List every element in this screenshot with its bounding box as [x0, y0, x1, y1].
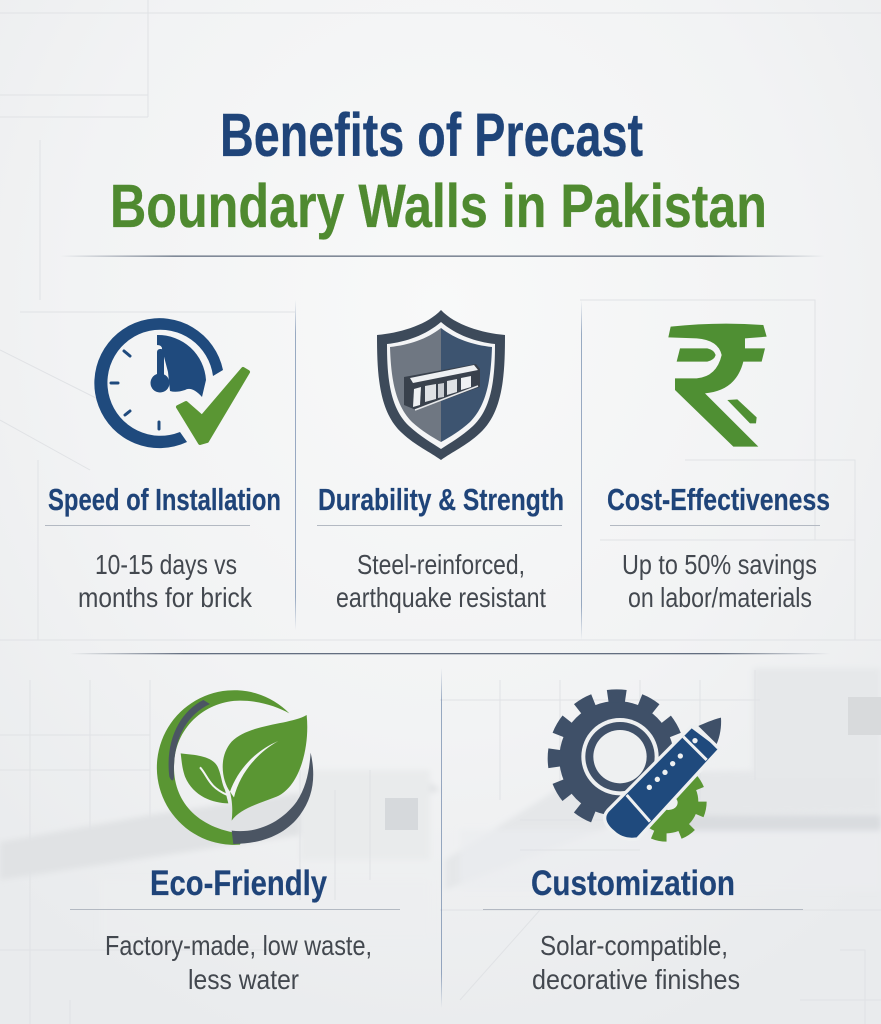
text: speed detail: months for brick [78, 582, 253, 613]
panel: eco-friendly [70, 690, 400, 995]
text: customization detail: decorative finishes [532, 964, 740, 995]
text: eco detail: Factory-made, low waste, [105, 930, 372, 961]
text: speed detail [78, 549, 253, 613]
text: cost detail: on labor/materials [628, 582, 812, 613]
heading: cost effectiveness: Cost-Effectiveness [607, 482, 830, 517]
text: cost detail [622, 549, 817, 613]
heading: customization: Customization [531, 864, 735, 903]
text: eco detail: less water [188, 964, 299, 995]
text: durability detail [336, 549, 546, 613]
text: durability detail: Steel-reinforced, [357, 549, 525, 580]
title: Benefits of Precast [220, 101, 643, 169]
icon: clock with check mark [94, 318, 248, 448]
heading: speed of installation: Speed of Installation [48, 482, 281, 517]
panel: customization [483, 696, 803, 995]
text: speed detail: 10-15 days vs [95, 549, 237, 580]
text: customization detail: Solar-compatible, [540, 930, 728, 961]
text: eco detail [105, 930, 372, 995]
text: customization detail [532, 930, 740, 995]
icon: leaves in a ring [157, 690, 313, 845]
heading: durability and strength: Durability & Strength [318, 482, 564, 517]
panel: speed of installation [45, 318, 281, 613]
text: durability detail: earthquake resistant [336, 582, 546, 613]
icon: shield with wall panel [377, 310, 505, 460]
text: cost detail: Up to 50% savings [622, 549, 817, 580]
panel: durability and strength [317, 310, 564, 613]
icon: gears with pen [554, 696, 721, 838]
icon: rupee symbol [668, 324, 767, 447]
title [110, 101, 767, 240]
heading: eco-friendly: Eco-Friendly [150, 864, 327, 903]
panel: cost effectiveness [607, 324, 830, 613]
